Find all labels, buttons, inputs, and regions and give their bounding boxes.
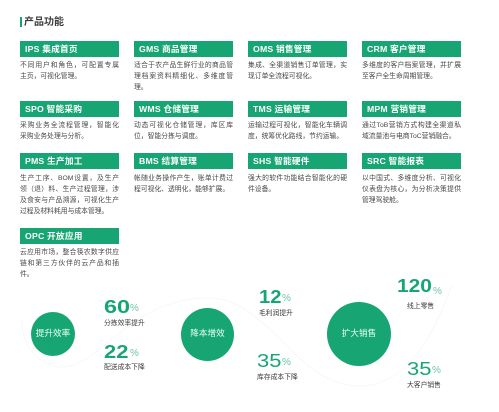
panel: SPO: 采购业务处理与分析。 <box>20 133 88 140</box>
stat: 22%: 22 <box>104 342 128 362</box>
stat: 35% 大客户: % <box>432 365 441 376</box>
title: 产品功能 <box>24 16 64 28</box>
panel: TMS: TMS 运输管理 <box>253 104 310 114</box>
panel: WMS: 位，智能分拣与调度。 <box>134 133 202 140</box>
circle: 提升效率 <box>31 312 75 356</box>
stat: 120%: 120 <box>397 276 432 296</box>
panel: GMS <box>134 41 233 91</box>
panel: MPM: 通过ToB营销方式构建全渠道私 <box>362 122 461 129</box>
panel: IPS: IPS 集成首页 <box>25 44 78 54</box>
stat: 120% <box>397 276 442 310</box>
stat: 120%: 线上零售 <box>407 302 434 310</box>
stat: 35% 大客户 <box>407 359 441 388</box>
panel: BMS: BMS 结算管理 <box>139 156 197 166</box>
stat: 35% 大客户: 35 <box>407 359 431 379</box>
panel: OMS <box>248 41 347 80</box>
panel: OMS: 现订单全流程可视化。 <box>248 73 316 80</box>
panel: PMS: 过程及材料耗用与成本管理。 <box>20 208 108 215</box>
panel: WMS: WMS 仓储管理 <box>139 104 199 114</box>
panel: MPM: MPM 营销管理 <box>367 104 426 114</box>
panel: GMS: 理档案资料精细化、多维度管 <box>134 73 233 80</box>
panel: WMS <box>134 101 233 140</box>
panel: TMS <box>248 101 347 140</box>
panel: OMS: 集成、全渠道销售订单管理，实 <box>248 62 347 69</box>
panel: SRC <box>362 153 461 204</box>
panel: SRC: 仪表盘为核心，为分析决策提供 <box>362 186 461 193</box>
panel: CRM: 至客户全生命周期管理。 <box>362 73 437 80</box>
panel: CRM: CRM 客户管理 <box>367 44 426 54</box>
panel: SHS: 件设备。 <box>248 186 275 193</box>
stat: 60%: % <box>130 303 139 314</box>
panel: OMS: OMS 销售管理 <box>253 44 312 54</box>
stat: 35% 库存: 35 <box>257 351 281 371</box>
stat: 35% 库存: % <box>282 357 291 368</box>
panel: GMS: GMS 商品管理 <box>139 44 198 54</box>
panel: SHS: 强大的软件功能结合智能化的硬 <box>248 174 347 182</box>
stat: 35% 库存 <box>257 351 298 380</box>
panel: SRC: 以中国式、多维度分析、可视化 <box>362 174 461 182</box>
stat: 22% <box>104 342 145 370</box>
stat: 12%: % <box>282 293 291 304</box>
panel: OPC: 件。 <box>20 271 34 278</box>
panel: IPS <box>20 41 119 80</box>
panel: SPO: SPO 智能采购 <box>25 104 82 114</box>
panel: OPC: OPC 开放应用 <box>25 230 83 240</box>
panel: PMS: 及食安与产品溯源，可视化生产 <box>20 197 119 204</box>
panel: OPC: 链和第三方伙伴的云产品和插 <box>20 260 119 267</box>
stat: 35% 大客户: 大客户销售 <box>407 382 441 388</box>
panel: BMS: 程可视化、透明化，能够扩展。 <box>134 186 229 193</box>
stat: 12%: 12 <box>259 287 281 307</box>
panel: BMS <box>134 153 233 193</box>
stat: 12%: 毛利润提升 <box>259 310 293 316</box>
panel: PMS: PMS 生产加工 <box>25 156 83 166</box>
panel: IPS: 主页，可视化管理。 <box>20 73 81 80</box>
circle: 提升效率: 提升效率 <box>36 328 70 338</box>
circle: 降本增效 <box>181 308 234 360</box>
panel: MPM: 域流量池与电商ToC营销融合。 <box>362 133 456 140</box>
stat: 60%: 分拣效率提升 <box>104 320 145 326</box>
panel: SPO <box>20 101 119 140</box>
panel: GMS: 适合于农产品生鲜行业的商品管 <box>134 62 233 69</box>
curve connecting circles <box>22 285 452 386</box>
panel: OPC: 云应用市场，整合筷农数字供应 <box>20 249 119 256</box>
stat: 35% 库存: 库存成本下降 <box>257 374 298 380</box>
stat: 60% <box>104 297 145 326</box>
stat: 60%: 60 <box>104 297 130 317</box>
stat: 22%: 配送成本下降 <box>104 364 145 370</box>
panel: TMS: 运输过程可视化，智能化车辆调 <box>248 122 347 129</box>
stat: 22%: % <box>130 348 139 359</box>
panel: WMS: 动态可视化仓储管理，库区库 <box>134 122 233 129</box>
stat: 12% <box>259 287 293 316</box>
panel: OPC <box>20 228 119 278</box>
panel: SRC: SRC 智能报表 <box>367 156 424 166</box>
panel: MPM <box>362 101 461 140</box>
panel: BMS: 帐随业务操作产生，账单计费过 <box>134 174 233 182</box>
circle: 扩大销售: 扩大销售 <box>342 328 376 338</box>
panel: SPO: 采购业务全流程管理，智能化 <box>20 122 119 129</box>
panel: SHS: SHS 智能硬件 <box>253 156 310 166</box>
stat: 120%: % <box>433 286 442 297</box>
panel: SRC: 管理驾驶舱。 <box>362 197 403 204</box>
panel: PMS: 领（退）料、生产过程管理，涉 <box>20 186 119 193</box>
panel: SHS <box>248 153 347 193</box>
circle: 扩大销售 <box>327 302 391 366</box>
circle: 降本增效: 降本增效 <box>190 328 225 338</box>
panel: PMS: 生产工序、BOM设置，及生产 <box>20 174 119 182</box>
panel: IPS: 不同用户和角色，可配置专属 <box>20 62 119 69</box>
panel: CRM: 多维度的客户档案管理，并扩展 <box>362 62 461 69</box>
panel: TMS: 度，统筹优化路线，节约运输。 <box>248 133 343 140</box>
panel: GMS: 理。 <box>134 84 148 91</box>
panel: CRM <box>362 41 461 80</box>
panel: PMS <box>20 153 119 215</box>
